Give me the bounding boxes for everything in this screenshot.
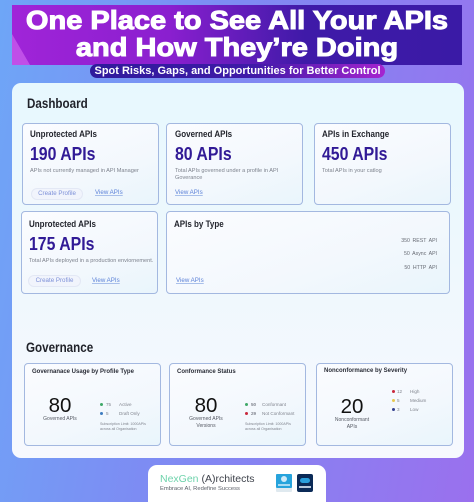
- metric: 80 APIs: [175, 144, 232, 164]
- description: Total APIs in your catlog: [322, 168, 382, 174]
- tagline: Embrace AI, Redefine Success: [160, 486, 240, 492]
- card: APIs in Exchange: [314, 123, 451, 205]
- metric label: [189, 416, 223, 428]
- subscription note: across all Organisation: [100, 427, 137, 431]
- metric: 450 APIs: [322, 144, 387, 164]
- subscription note: across all Organisation: [245, 427, 282, 431]
- legend: Conformant: [245, 402, 286, 407]
- description: Goverance: [175, 175, 202, 181]
- metric label: Governed APIs: [43, 416, 77, 422]
- title banner: [12, 5, 462, 65]
- legend: Medium: 5: [397, 398, 400, 403]
- description: [175, 168, 278, 181]
- legend: Not Conformant: [245, 411, 294, 416]
- legend: Draft Only: Draft Only: [119, 411, 140, 416]
- link: View APIs: View APIs: [95, 189, 123, 196]
- card: Governed APIs: [166, 123, 303, 205]
- brand name: NexGen (A)rchitects: [160, 473, 255, 485]
- legend: Draft Only: [100, 411, 140, 416]
- metric: 80: 80: [49, 394, 71, 417]
- metric: 20: 20: [341, 395, 363, 418]
- main panel: [12, 83, 464, 458]
- legend: Not Conformant: Not Conformant: [262, 411, 294, 416]
- type list: [401, 238, 437, 271]
- badge colour block: [276, 474, 292, 488]
- subscription note: [100, 422, 146, 431]
- card heading: Governed APIs: [175, 129, 232, 139]
- legend: Low: [392, 407, 418, 412]
- legend: High: High: [410, 389, 419, 394]
- legend: Low: Low: [410, 407, 418, 412]
- title text: and How They’re Doing: [76, 32, 398, 62]
- description: APIs not currently managed in API Manager: [30, 168, 139, 174]
- heading: Governance: Governance: [26, 339, 93, 355]
- legend: Draft Only: 5: [106, 411, 109, 416]
- title text: [26, 5, 448, 62]
- title text: One Place to See All Your APIs: [26, 5, 448, 35]
- metric label: Nonconformant: [335, 417, 369, 423]
- badge wordmark bar: [299, 486, 311, 488]
- card heading: APIs in Exchange: [322, 129, 389, 139]
- REST API count: 350 REST API: [401, 238, 437, 244]
- badge mark: [281, 476, 287, 482]
- description: Total APIs deployed in a production enviornement.: [29, 258, 153, 264]
- card heading: Governanace Usage by Profile Type: [32, 369, 134, 375]
- link: View APIs: View APIs: [176, 277, 204, 284]
- legend: Conformant: Conformant: [262, 402, 286, 407]
- metric label: Governed APIs: [189, 416, 223, 422]
- subscription note: Subscription Limit: 1000APIs: [100, 422, 146, 426]
- icon: cloud mark: [300, 478, 310, 483]
- metric: 80: 80: [195, 394, 217, 417]
- legend: Active: 75: [106, 402, 111, 407]
- card: Governance usage: [24, 363, 161, 446]
- button: Create Profile: [28, 275, 81, 287]
- card heading: Conformance Status: [177, 369, 236, 375]
- icon: Salesforce badge: [297, 474, 313, 492]
- metric label: APIs: [347, 424, 357, 430]
- metric label: [335, 417, 370, 430]
- banner corner accent: [12, 34, 30, 65]
- HTTP API count: 50 HTTP API: [404, 265, 437, 271]
- legend: Not Conformant: 29: [251, 411, 256, 416]
- legend: Medium: [392, 398, 426, 403]
- description: Total APIs governed under a profile in API: [175, 168, 278, 174]
- card: Nonconformance by severity: [316, 363, 453, 446]
- metric label: Versions: [196, 422, 216, 428]
- footer logo panel: [148, 465, 326, 502]
- badge wordmark bar: [278, 484, 290, 486]
- card heading: Unprotected APIs: [30, 129, 97, 139]
- card: APIs by Type: [166, 211, 450, 294]
- subscription note: Subscription Limit: 1000APIs: [245, 422, 291, 426]
- Async API count: 50 Async API: [404, 251, 437, 257]
- metric: 190 APIs: [30, 144, 95, 164]
- legend: Medium: Medium: [410, 398, 426, 403]
- heading: Dashboard: Dashboard: [27, 95, 88, 111]
- link: View APIs: View APIs: [175, 189, 203, 196]
- button: Create Profile: [31, 188, 83, 200]
- button: Create Profile: Create Profile: [36, 277, 73, 284]
- legend: Low: 3: [397, 407, 400, 412]
- card: Conformance status: [169, 363, 306, 446]
- card heading: Unprotected APIs: [29, 219, 96, 229]
- card: Unprotected APIs 175: [21, 211, 158, 294]
- legend: Active: [100, 402, 132, 407]
- button: Create Profile: Create Profile: [38, 190, 76, 197]
- metric: 175 APIs: [29, 234, 94, 254]
- subtitle pill: Spot Risks, Gaps, and Opportunities for Better Control: [94, 65, 381, 77]
- icon: MuleSoft badge: [276, 474, 292, 492]
- legend: Active: Active: [119, 402, 132, 407]
- legend: Conformant: 50: [251, 402, 256, 407]
- legend: High: [392, 389, 420, 394]
- legend: High: 12: [397, 389, 402, 394]
- card: Unprotected APIs 190: [22, 123, 159, 205]
- card heading: Nonconformance by Severity: [324, 368, 407, 374]
- subscription note: [245, 422, 291, 431]
- link: View APIs: View APIs: [92, 277, 120, 284]
- card heading: APIs by Type: [174, 219, 224, 229]
